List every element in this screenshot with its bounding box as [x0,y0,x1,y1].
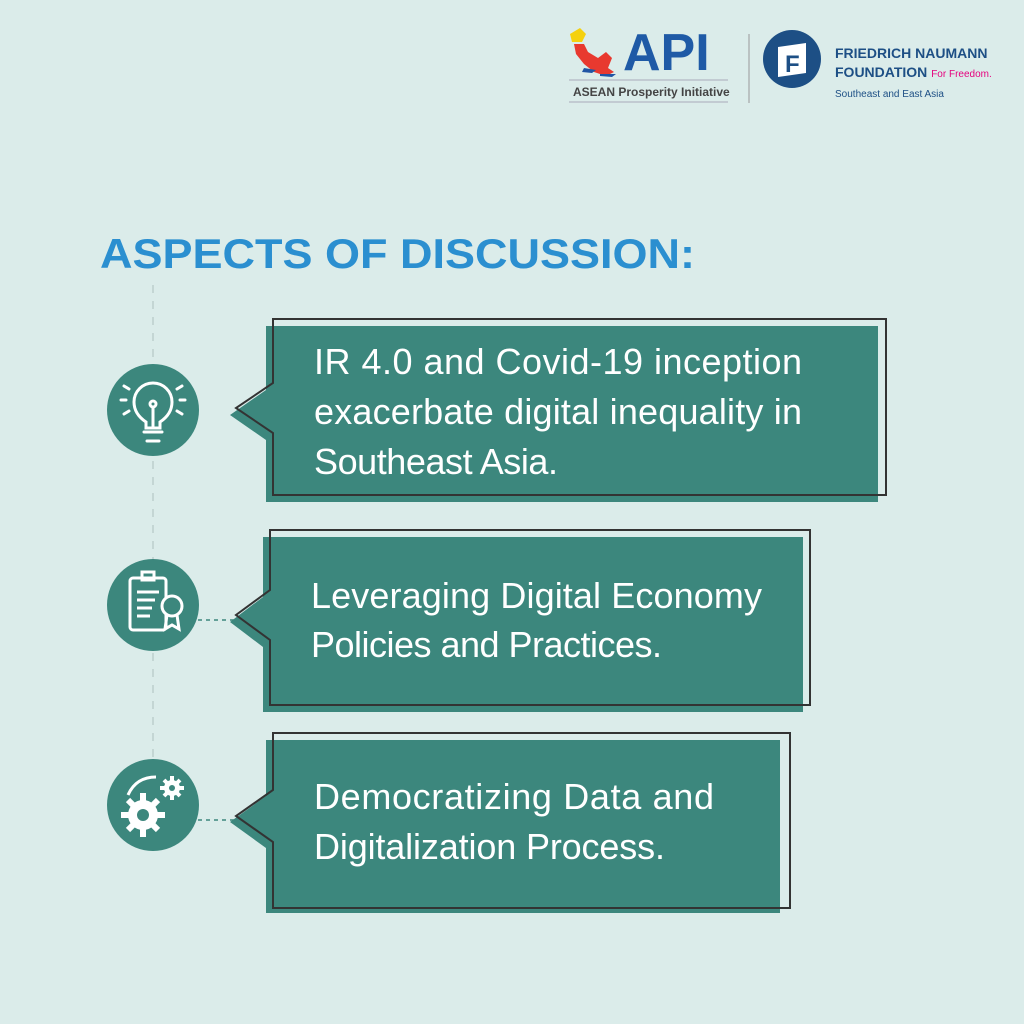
icon: clipboard certificate [107,559,199,651]
logo: Friedrich Naumann Foundation: Southeast and East Asia [835,89,944,100]
logo: API: API [623,24,710,82]
logo: API: ASEAN Prosperity Initiative [573,85,730,99]
icon: gears [107,759,199,851]
panel: box 1: IR 4.0 and Covid-19 inception [314,341,802,382]
panel: box 1: Southeast Asia. [314,441,558,482]
panel: box 3 [230,733,790,913]
title: ASPECTS OF DISCUSSION: [100,230,695,277]
timeline dashed line [152,285,154,770]
panel: box 2: Policies and Practices. [311,624,662,665]
logo: Friedrich Naumann Foundation: FRIEDRICH NAUMANN [835,45,987,61]
logo: Friedrich Naumann Foundation: F [785,51,800,78]
panel: box 1: exacerbate digital inequality in [314,391,802,432]
panel: box 3: Democratizing Data and [314,776,714,817]
logo: Friedrich Naumann Foundation [763,30,992,100]
panel: box 2: Leveraging Digital Economy [311,575,762,616]
logo: API [569,24,749,103]
logo: Friedrich Naumann Foundation: FOUNDATION For Freedom. [835,64,992,80]
panel: box 3: Digitalization Process. [314,826,665,867]
panel: box 2 [230,530,810,712]
panel: box 1 [230,319,886,502]
icon: lightbulb [107,364,199,456]
